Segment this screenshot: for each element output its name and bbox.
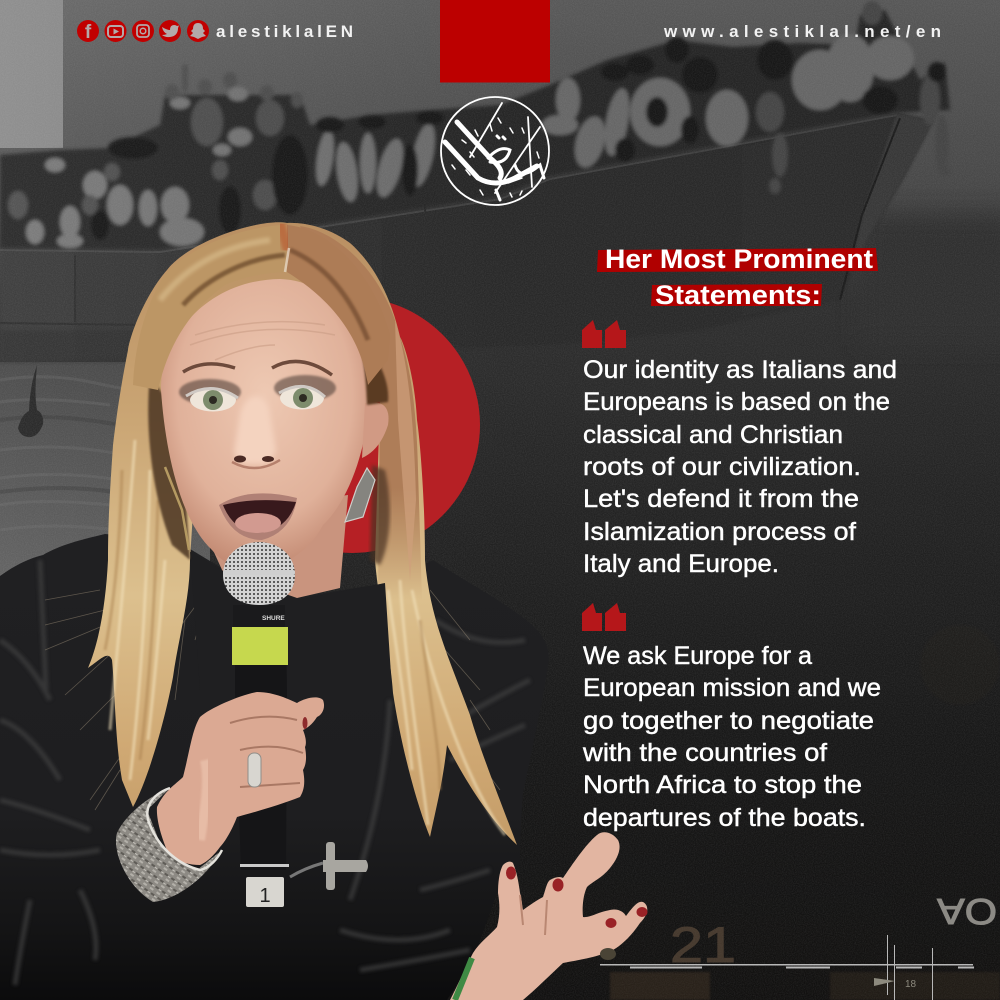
boat prow edge: [850, 113, 933, 275]
microphone: 1: [259, 885, 271, 907]
social handle: alestiklalEN: [216, 22, 353, 41]
red fingernail: [302, 717, 308, 729]
grunge print marks, bottom right: [600, 625, 1000, 1000]
small triangle marker: [874, 978, 895, 986]
quote 1 text: Italy and Europe.: [583, 550, 779, 578]
quote 2 text: go together to negotiate: [583, 707, 874, 735]
right earring: [345, 468, 375, 522]
left eye: [179, 379, 241, 412]
open mouth: [219, 493, 297, 540]
ear: [362, 402, 389, 458]
hair: shadow under the fringe: [148, 375, 190, 560]
quotation mark icon 2: [582, 603, 626, 631]
figure: woman speaking into microphone: [0, 222, 648, 1000]
icon: snapchat: [187, 20, 209, 42]
left earring: [165, 467, 189, 550]
hand holding microphone: [157, 692, 324, 865]
right eye: [274, 375, 336, 410]
quote 1 text: Our identity as Italians and: [583, 356, 897, 384]
finger separators: [230, 717, 303, 787]
heading: Her Most Prominent Statements: Her Most Prominent: [605, 244, 873, 274]
quote 2 text: We ask Europe for a: [583, 642, 812, 670]
crowd of migrants on deck: [0, 1, 951, 250]
jacket collar: [190, 552, 392, 690]
quote 2 text: European mission and we: [583, 674, 881, 702]
social media icons: [77, 20, 209, 43]
jacket: [0, 534, 549, 1000]
quote 1 text: Let's defend it from the: [583, 485, 859, 513]
far water on the right: [860, 215, 1000, 345]
silver woven bracelet: [116, 788, 222, 902]
quote 2 text: departures of the boats.: [583, 804, 866, 832]
quote 1 text: Islamization process of: [583, 518, 856, 546]
icon: youtube: [104, 20, 126, 42]
nose: [232, 396, 280, 468]
neck: [197, 495, 348, 598]
hair: wisps over jacket: [45, 590, 500, 810]
wall at upper left: [0, 0, 63, 148]
quote 2 text: North Africa to stop the: [583, 771, 862, 799]
quote 1 text: Europeans is based on the: [583, 388, 890, 416]
quote 1 text: [583, 356, 897, 578]
eyebrows: [183, 364, 235, 372]
quotation mark icon 1: [582, 320, 626, 348]
hair: dark strands beside temple: [360, 340, 388, 405]
heading highlight brush strokes: [597, 248, 878, 306]
inverted letters AO: OA: [937, 891, 997, 932]
quote 2 text: with the countries of: [582, 739, 827, 767]
hair: blond streaks: [110, 440, 505, 835]
thin horizontal rules: [600, 935, 974, 1000]
red circle behind the figure: [224, 297, 480, 553]
swimmer silhouette: [18, 365, 43, 437]
raised left hand: [450, 832, 648, 1000]
forehead wrinkles: [190, 322, 335, 360]
hair parting: [281, 226, 287, 248]
quote 2 text: [582, 642, 881, 832]
logo: calligraphic emblem in a circle: [441, 97, 549, 205]
small inverted number: 18: [905, 979, 917, 990]
icon: instagram: [132, 20, 154, 42]
microphone: SHURE: [262, 615, 285, 622]
hair: right-side copper tones: [300, 226, 422, 600]
quote 1 text: roots of our civilization.: [583, 453, 861, 481]
boat hull: [0, 113, 933, 362]
quote 1 text: classical and Christian: [583, 421, 843, 449]
heading: Her Most Prominent Statements: Statements:: [655, 280, 821, 310]
red square at top: [440, 0, 550, 82]
microphone: [223, 542, 295, 907]
face: [161, 279, 368, 569]
fringe: right sweep: [287, 225, 390, 385]
metal buckle: [290, 842, 368, 890]
heading: Her Most Prominent Statements: [597, 244, 878, 310]
website URL: www.alestiklal.net/en: [663, 22, 941, 41]
hair: main mass: [88, 222, 517, 845]
water on the left: [0, 362, 210, 582]
icon: twitter: [159, 20, 181, 42]
ring: [248, 753, 261, 787]
fringe: left sweep: [133, 225, 287, 390]
icon: facebook: f: [85, 22, 92, 43]
printed number 21: 21: [670, 917, 736, 973]
